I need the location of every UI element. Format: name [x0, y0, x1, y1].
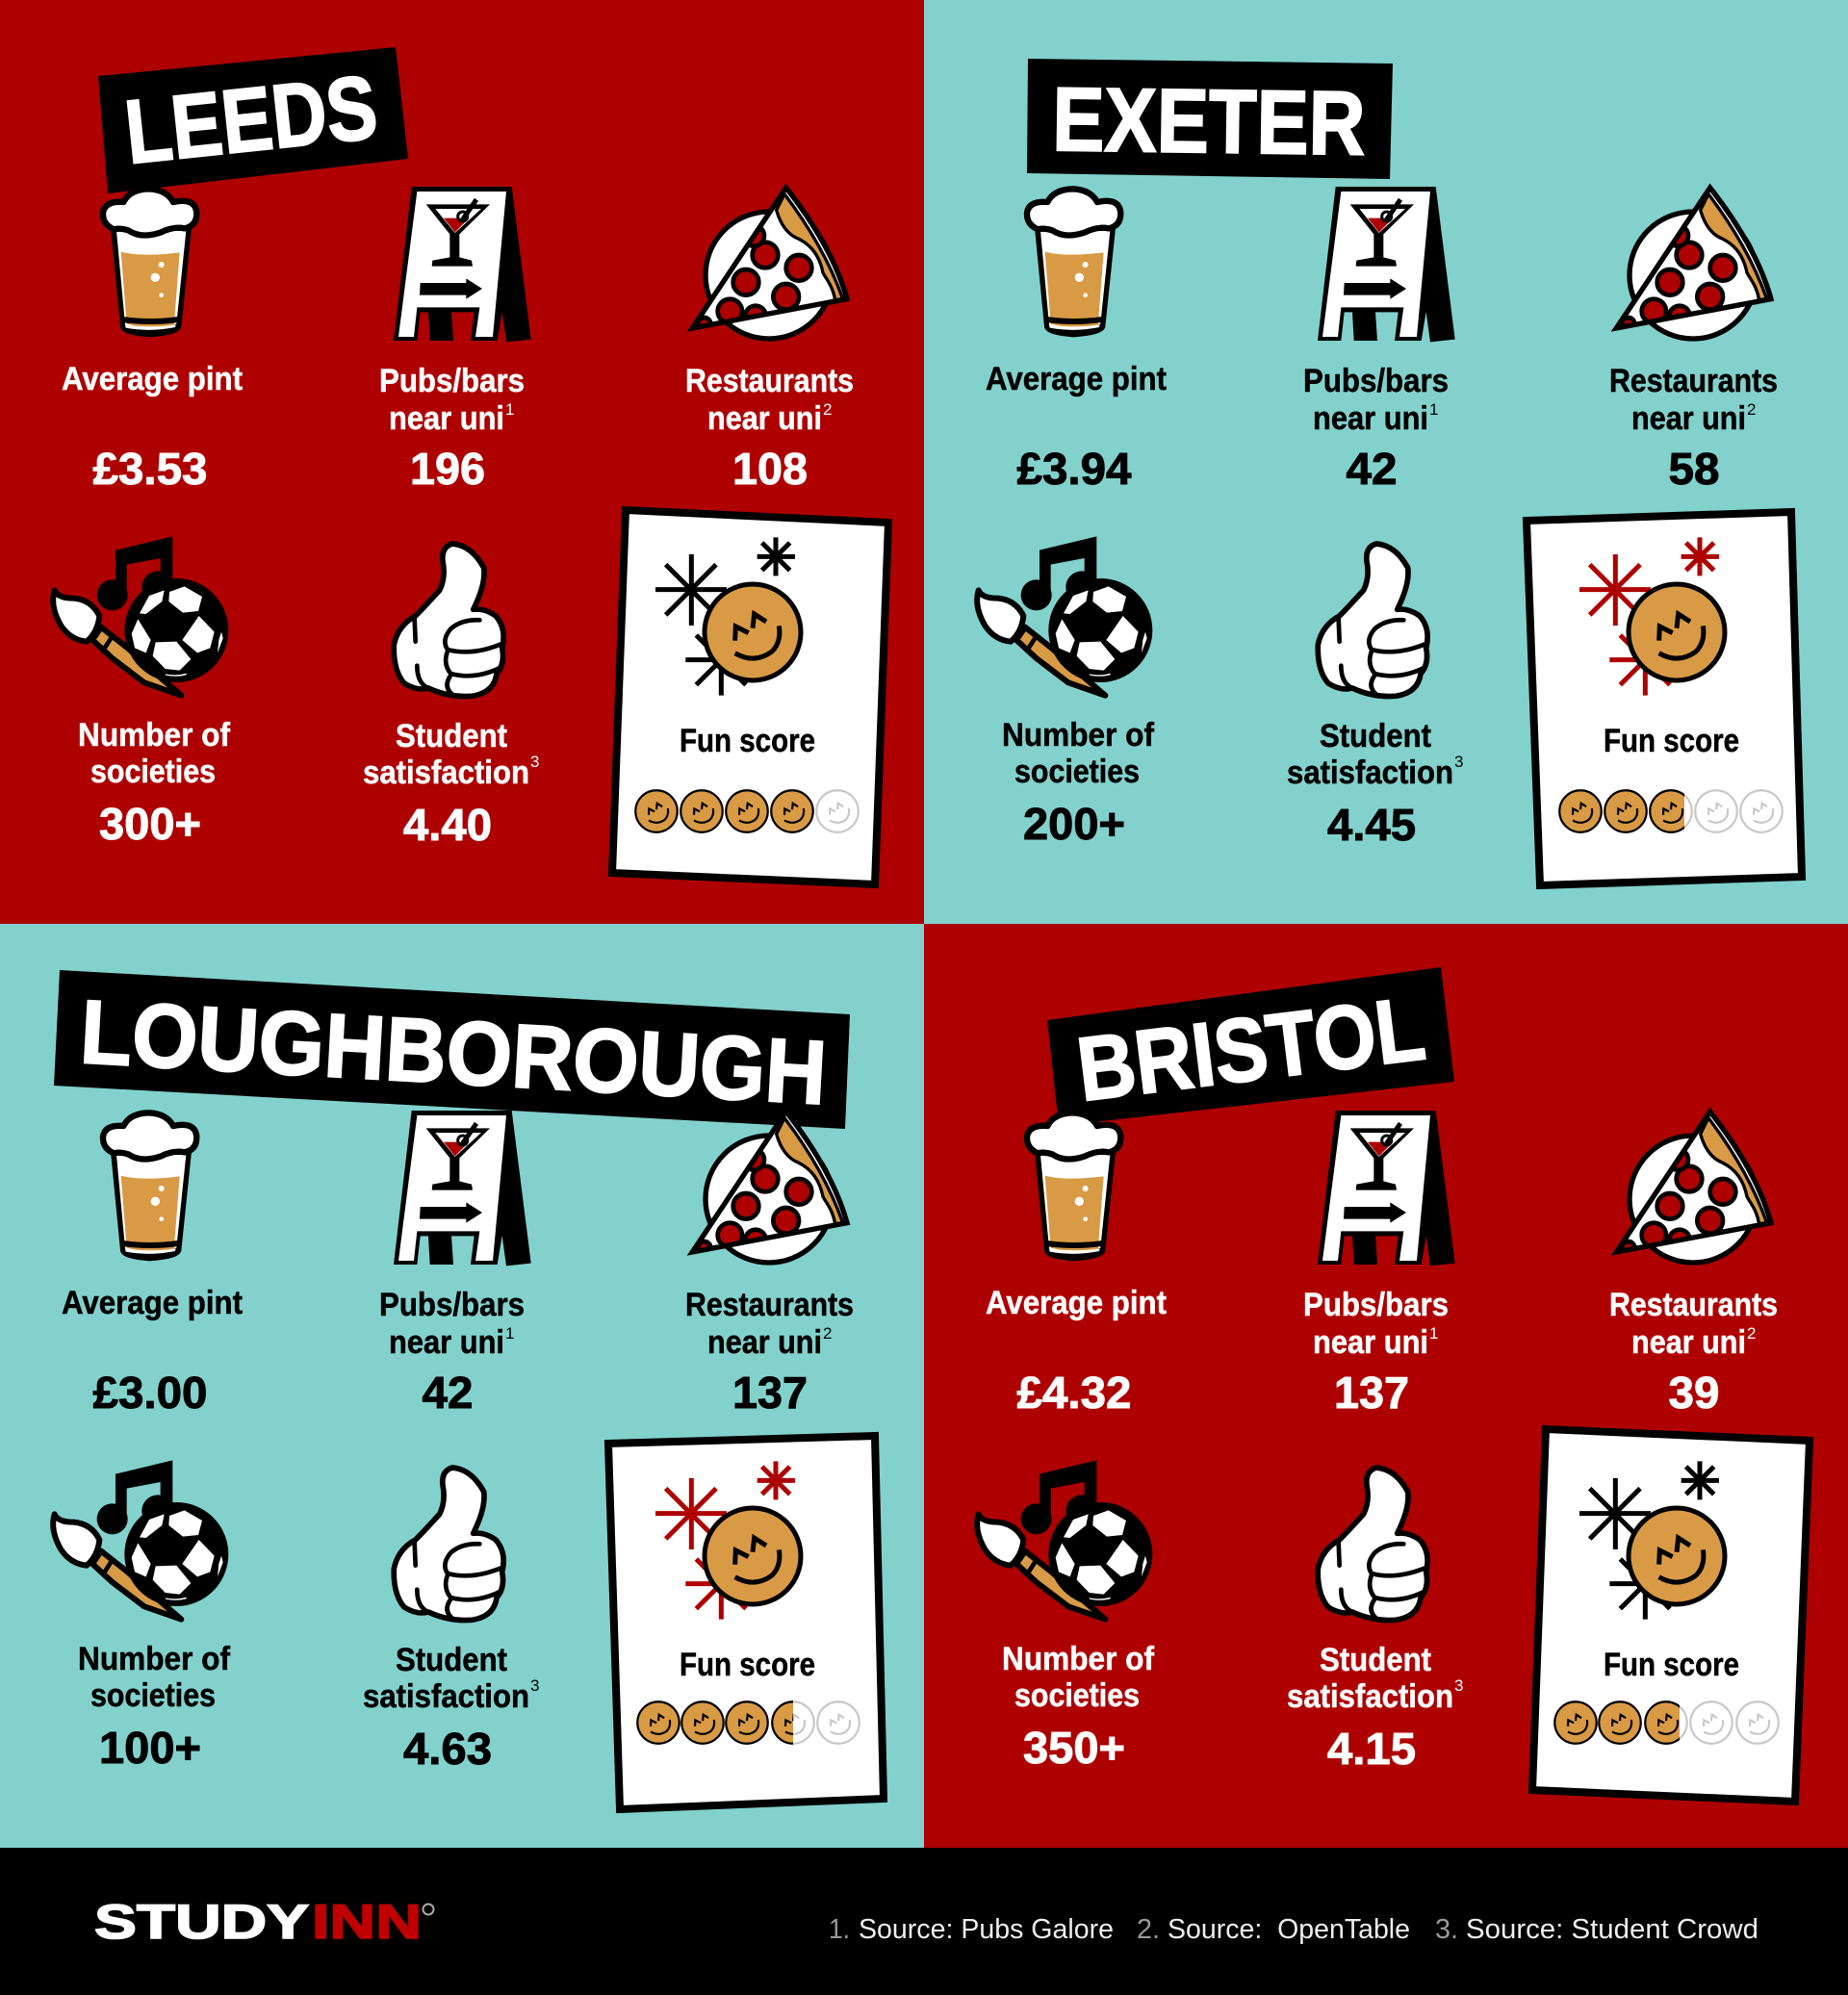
stat: societies: societies — [1014, 1677, 1140, 1714]
logo: Study Inn — [94, 1895, 433, 1949]
stat: restaurants: Restaurants — [685, 1287, 854, 1323]
panel: Loughborough — [0, 924, 924, 1848]
stat: restaurants: near uni — [707, 400, 822, 437]
stat: satisfaction: 3 — [1454, 753, 1463, 771]
stat: restaurants — [1609, 1287, 1778, 1418]
logo: Study Inn: STUDY — [94, 1895, 309, 1949]
stat: pubs and bars: 42 — [422, 1368, 474, 1418]
stat: satisfaction: 4.15 — [1327, 1724, 1416, 1774]
heading: Leeds: LEEDS — [120, 56, 382, 183]
stat: pubs and bars: near uni — [389, 400, 504, 437]
stat: restaurants: Restaurants — [1609, 363, 1778, 399]
stat: restaurants: near uni — [1631, 400, 1746, 437]
stat: societies: societies — [90, 1677, 216, 1714]
stat: pubs and bars: Pubs/bars — [1303, 363, 1449, 399]
stat: average pint — [62, 1285, 243, 1418]
stat: average pint: £3.94 — [1016, 444, 1132, 494]
icon: pint — [1027, 1113, 1120, 1259]
stat: average pint: Average pint — [986, 361, 1167, 397]
card: fun score: Fun score — [1604, 723, 1739, 759]
stat: societies — [78, 717, 231, 849]
stat: societies: 100+ — [99, 1723, 201, 1773]
stat: societies: societies — [90, 754, 216, 790]
stat: pubs and bars — [379, 1287, 525, 1418]
stat: restaurants: near uni — [1631, 1324, 1746, 1361]
sources: Source: Student Crowd — [1466, 1914, 1758, 1945]
stat: pubs and bars: near uni — [389, 1324, 504, 1361]
icon: pint — [1027, 189, 1120, 335]
icon: bar sign — [394, 1111, 531, 1266]
stat: restaurants: 58 — [1669, 444, 1719, 494]
stat: pubs and bars — [1303, 1287, 1449, 1418]
stat: pubs and bars: near uni — [1313, 1324, 1428, 1361]
panel: Exeter — [924, 0, 1848, 924]
card: fun score — [608, 1436, 884, 1809]
stat: average pint — [986, 361, 1167, 494]
stat: average pint: Average pint — [986, 1285, 1167, 1321]
card: fun score — [612, 510, 888, 884]
stat: satisfaction: 4.40 — [403, 800, 492, 850]
card: fun score: Fun score — [680, 1647, 815, 1683]
stat: societies: Number of — [78, 717, 231, 754]
stat: restaurants: 2 — [823, 400, 832, 419]
stat: average pint: £4.32 — [1016, 1368, 1132, 1418]
stat: satisfaction — [363, 718, 539, 850]
heading: Exeter: EXETER — [1052, 68, 1366, 174]
stat: pubs and bars: 137 — [1334, 1368, 1409, 1418]
stat: satisfaction: Student — [396, 1642, 507, 1678]
stat: average pint: Average pint — [62, 361, 243, 397]
stat: satisfaction — [363, 1642, 539, 1774]
stat: restaurants: 2 — [1747, 400, 1756, 419]
stat: societies: 350+ — [1023, 1723, 1125, 1773]
icon: thumbs up — [394, 544, 503, 697]
sources: 1. — [829, 1914, 850, 1945]
stat: average pint: £3.53 — [92, 444, 208, 494]
stat: pubs and bars: Pubs/bars — [1303, 1287, 1449, 1323]
icon: bar sign — [1318, 1111, 1455, 1266]
icon: pizza — [1616, 188, 1771, 339]
stat: pubs and bars: 42 — [1346, 444, 1398, 494]
stat: pubs and bars: 1 — [505, 400, 514, 419]
icon: pint — [103, 189, 196, 335]
stat: average pint — [62, 361, 243, 494]
stat: pubs and bars: 1 — [1429, 400, 1438, 419]
icon: pizza — [692, 1112, 847, 1263]
card: fun score — [1532, 1429, 1810, 1802]
stat: pubs and bars: Pubs/bars — [379, 1287, 525, 1323]
stat: restaurants — [685, 1287, 854, 1418]
heading: Loughborough: LOUGHBOROUGH — [78, 981, 830, 1123]
sources — [829, 1914, 1758, 1945]
stat: societies: 200+ — [1023, 799, 1125, 849]
stat: satisfaction: 3 — [530, 1676, 539, 1695]
stat: satisfaction: 3 — [1454, 1676, 1463, 1695]
stat: satisfaction — [1287, 718, 1463, 850]
stat: satisfaction: 4.63 — [403, 1724, 492, 1774]
stat: pubs and bars: 196 — [410, 444, 485, 494]
icon: bar sign — [1318, 187, 1455, 342]
stat: societies: Number of — [78, 1641, 231, 1677]
stat: societies — [1002, 717, 1155, 849]
sources: Source: Pubs Galore — [859, 1914, 1114, 1945]
stat: pubs and bars: 1 — [505, 1324, 514, 1343]
stat: restaurants — [1609, 363, 1778, 494]
stat: restaurants: Restaurants — [1609, 1287, 1778, 1323]
stat: average pint: £3.00 — [92, 1368, 208, 1418]
icon: pizza — [692, 188, 847, 339]
stat: restaurants: 137 — [732, 1368, 808, 1418]
stat: societies: Number of — [1002, 717, 1155, 754]
sources: 3. — [1435, 1914, 1458, 1945]
sources: 2. — [1137, 1914, 1160, 1945]
icon: pint — [103, 1113, 196, 1259]
icon: societies — [53, 536, 228, 696]
stat: restaurants: 2 — [1747, 1324, 1756, 1343]
icon: thumbs up — [1318, 544, 1427, 697]
stat: average pint — [986, 1285, 1167, 1418]
stat: pubs and bars: near uni — [1313, 400, 1428, 437]
stat: restaurants: Restaurants — [685, 363, 854, 399]
stat: average pint: Average pint — [62, 1285, 243, 1321]
stat: societies: Number of — [1002, 1641, 1155, 1677]
card: fun score — [1527, 512, 1802, 885]
logo: Study Inn: INN — [312, 1895, 422, 1949]
panel: Bristol — [924, 924, 1848, 1848]
stat: restaurants — [685, 363, 854, 494]
stat: satisfaction: Student — [396, 718, 507, 755]
stat: satisfaction: Student — [1320, 1642, 1431, 1678]
icon: pizza — [1616, 1112, 1771, 1263]
card: fun score: Fun score — [1604, 1647, 1739, 1683]
stat: satisfaction: Student — [1320, 718, 1431, 755]
icon: thumbs up — [394, 1468, 503, 1621]
icon: societies — [53, 1460, 228, 1620]
stat: satisfaction: satisfaction — [363, 755, 529, 791]
stat: satisfaction: 4.45 — [1327, 800, 1416, 850]
stat: societies — [1002, 1641, 1155, 1773]
stat: restaurants: 108 — [732, 444, 808, 494]
sources: Source: OpenTable — [1168, 1914, 1410, 1945]
stat: restaurants: near uni — [707, 1324, 822, 1361]
stat: restaurants: 39 — [1669, 1368, 1719, 1418]
stat: pubs and bars: 1 — [1429, 1324, 1438, 1343]
stat: pubs and bars — [379, 363, 525, 494]
stat: societies: societies — [1014, 754, 1140, 790]
stat: societies — [78, 1641, 231, 1773]
stat: satisfaction: satisfaction — [1287, 755, 1453, 791]
icon: thumbs up — [1318, 1468, 1427, 1621]
stat: satisfaction — [1287, 1642, 1463, 1774]
footer — [0, 1848, 1848, 1995]
stat: pubs and bars: Pubs/bars — [379, 363, 525, 399]
stat: restaurants: 2 — [823, 1324, 832, 1343]
icon: societies — [977, 1460, 1152, 1620]
stat: satisfaction: 3 — [530, 753, 539, 771]
panel: Leeds — [0, 0, 924, 924]
stat: satisfaction: satisfaction — [363, 1678, 529, 1715]
icon: bar sign — [394, 187, 531, 342]
stat: societies: 300+ — [99, 799, 201, 849]
card: fun score: Fun score — [680, 723, 815, 759]
heading: Bristol: BRISTOL — [1072, 978, 1430, 1120]
stat: pubs and bars — [1303, 363, 1449, 494]
icon: societies — [977, 536, 1152, 696]
stat: satisfaction: satisfaction — [1287, 1678, 1453, 1715]
